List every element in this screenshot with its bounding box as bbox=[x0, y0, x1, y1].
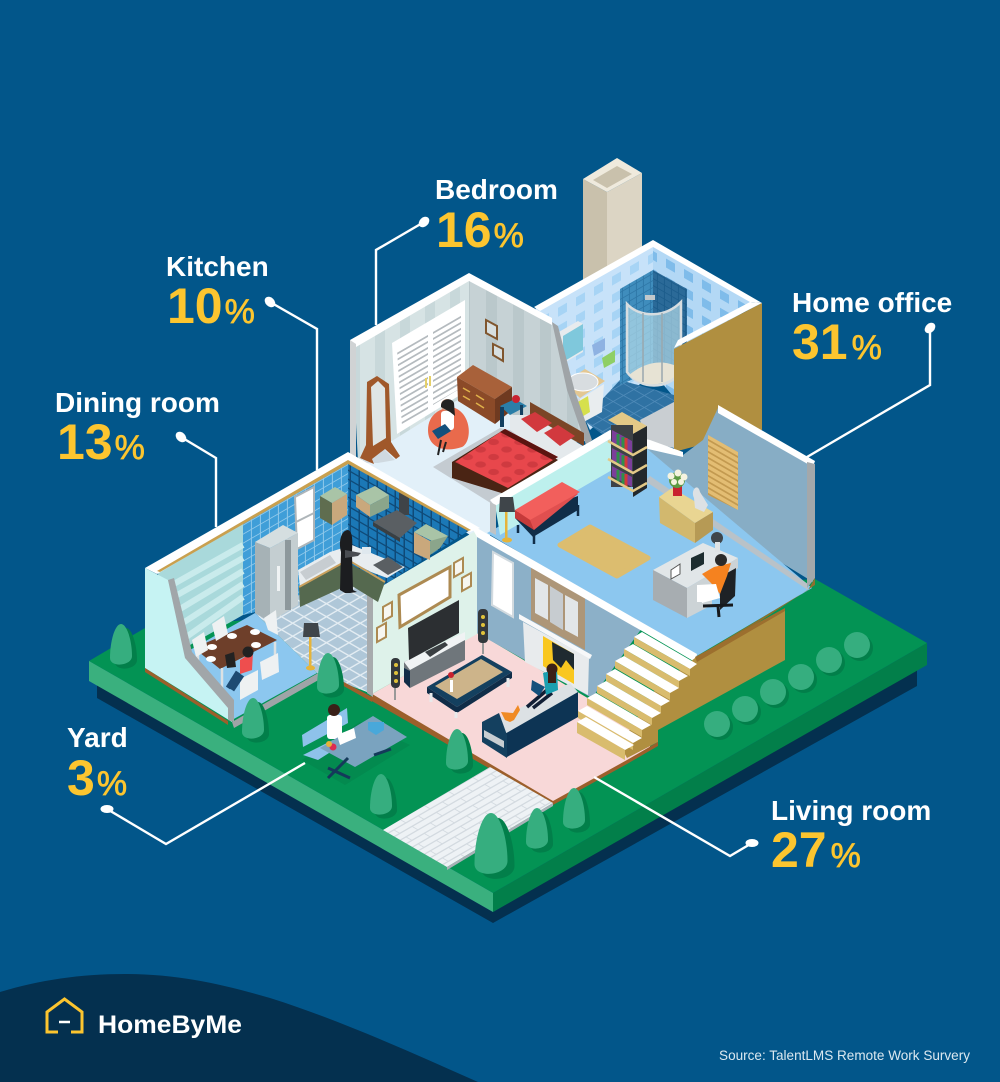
office chair and person bbox=[697, 554, 736, 617]
icon: bathroom cabinet bbox=[557, 321, 583, 364]
icon: sink bbox=[564, 369, 605, 424]
rug bbox=[560, 527, 648, 576]
drawer cabinet bbox=[659, 488, 713, 543]
bushes bbox=[704, 632, 873, 740]
yard path bbox=[383, 767, 553, 870]
icon: cat bbox=[501, 705, 520, 722]
chairs bbox=[192, 610, 279, 700]
callout: Yard: 3% bbox=[67, 750, 127, 806]
icon: shower cabin bbox=[627, 295, 681, 386]
callout: Kitchen: 10% bbox=[167, 278, 255, 334]
dining table bbox=[194, 625, 277, 690]
closet bbox=[392, 300, 465, 434]
callout: Yard bbox=[67, 722, 305, 844]
callout: Kitchen: Kitchen bbox=[166, 251, 269, 282]
cut wall bbox=[145, 568, 232, 722]
callout: Bedroom bbox=[376, 174, 558, 325]
callout: Bedroom: Bedroom bbox=[435, 174, 558, 205]
callout: Dining room: 13% bbox=[57, 414, 145, 470]
living room base edge bbox=[340, 680, 372, 702]
callout: Living room bbox=[594, 777, 931, 878]
icon: flowers bbox=[668, 470, 688, 496]
logo: HomeByMe: HomeByMe bbox=[98, 1011, 242, 1039]
callout: Yard: Yard bbox=[67, 722, 128, 753]
counter bbox=[298, 545, 405, 607]
wall art bbox=[377, 558, 471, 642]
panel: home office bbox=[487, 405, 815, 664]
coffee table bbox=[427, 655, 512, 718]
TV bbox=[404, 600, 465, 688]
wall pictures bbox=[486, 320, 503, 361]
floor lamp bbox=[499, 497, 515, 542]
window bbox=[492, 552, 513, 617]
floor rim bbox=[470, 524, 697, 662]
person cooking bbox=[340, 530, 371, 593]
floor lamp bbox=[303, 623, 320, 670]
desk bbox=[653, 532, 738, 618]
couch with person bbox=[482, 664, 578, 758]
callout: Bedroom: 16% bbox=[436, 202, 524, 258]
range hood bbox=[373, 490, 417, 542]
person on bean bag bbox=[428, 399, 469, 455]
footer wave bbox=[0, 974, 478, 1082]
speakers bbox=[391, 609, 488, 700]
callout: Kitchen bbox=[166, 251, 317, 470]
icon: towels bbox=[592, 338, 615, 368]
icon: dresser bbox=[457, 365, 512, 424]
foundation and stairs bbox=[553, 608, 785, 805]
callout: Dining room: Dining room bbox=[55, 387, 220, 418]
panel: dining room bbox=[145, 452, 480, 728]
bath rim bbox=[534, 240, 762, 311]
yard table and person bbox=[302, 704, 410, 785]
person at table bbox=[225, 646, 254, 690]
callout: Home office bbox=[792, 287, 952, 457]
panel: living room bbox=[367, 530, 650, 805]
fridge bbox=[255, 525, 298, 622]
icon: nightstand and lamp bbox=[500, 395, 527, 427]
chimney bbox=[583, 158, 642, 282]
source note: Source: TalentLMS Remote Work Survery bbox=[719, 1048, 970, 1063]
tan exterior wall bbox=[674, 302, 762, 452]
logo: HomeByMe bbox=[47, 999, 242, 1039]
panel: bedroom bbox=[350, 273, 600, 545]
platform bbox=[89, 579, 927, 923]
callout: Dining room bbox=[55, 387, 220, 527]
callout: Home office: 31% bbox=[792, 314, 882, 370]
window blind bbox=[708, 435, 738, 510]
window bbox=[295, 487, 314, 549]
callout: Living room: 27% bbox=[771, 822, 861, 878]
wall cabinets bbox=[320, 486, 448, 560]
panel: kitchen bbox=[243, 460, 470, 692]
panel: bathroom bbox=[535, 245, 756, 448]
trees bbox=[110, 624, 590, 879]
callout: Home office: Home office bbox=[792, 287, 952, 318]
mantel panel bbox=[531, 567, 585, 650]
red sofa bbox=[515, 482, 580, 544]
fireplace bbox=[519, 614, 592, 695]
bed bbox=[433, 402, 590, 512]
callout: Living room: Living room bbox=[771, 795, 931, 826]
bookshelf bbox=[608, 412, 647, 497]
bust bbox=[693, 487, 708, 512]
icon: standing mirror bbox=[360, 376, 400, 464]
